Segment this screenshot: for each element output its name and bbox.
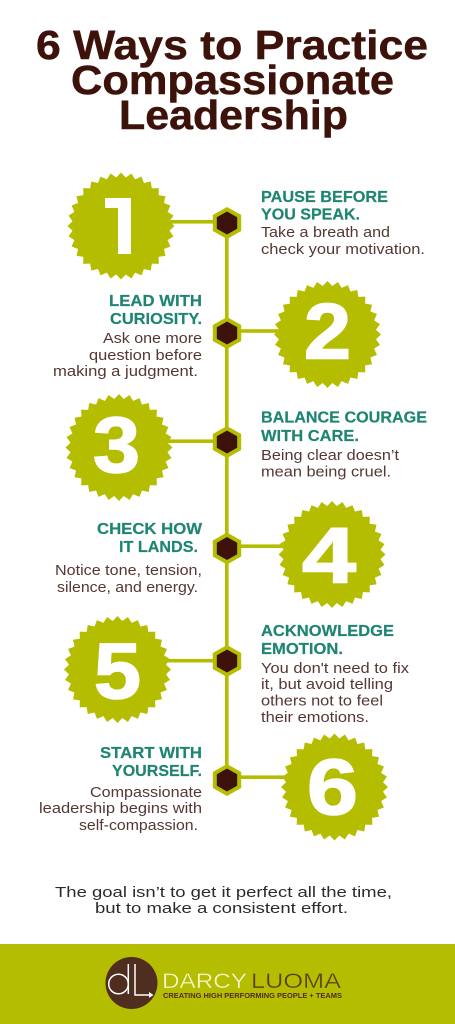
title: Leadership: [119, 92, 348, 138]
title: 6 Ways to Practice: [36, 22, 428, 68]
step 1 node: [213, 207, 241, 239]
step 4 text: silence, and energy.: [57, 580, 198, 596]
step 2 text: CURIOSITY.: [110, 311, 202, 328]
step 1 text: check your motivation.: [261, 242, 425, 258]
logo wordmark: DARCY: [162, 970, 247, 993]
step 2 text: question before: [89, 348, 202, 364]
step 2 badge: 2: [304, 286, 351, 376]
step 5 badge: 5: [94, 626, 141, 715]
step 6 badge: 6: [307, 742, 358, 831]
step 6 badge: [240, 734, 388, 840]
title: Compassionate: [71, 57, 394, 103]
closing statement: The goal isn’t to get it perfect all the time,: [55, 884, 392, 901]
step 3 badge: [66, 394, 215, 501]
closing statement: [55, 884, 392, 917]
step 6 text: leadership begins with: [39, 801, 202, 817]
step 6 text: YOURSELF.: [112, 763, 202, 780]
step 5 text: You don't need to fix: [261, 661, 410, 677]
step 1 text: PAUSE BEFORE: [261, 189, 388, 206]
footer band: [0, 944, 455, 1024]
step 1 badge: [68, 172, 215, 280]
step 4 badge: 4: [302, 510, 356, 600]
step 2 node: [213, 317, 241, 349]
logo wordmark: LUOMA: [251, 970, 341, 993]
step 4 text: Notice tone, tension,: [55, 563, 202, 579]
title: [36, 22, 428, 138]
step 4 text: [55, 521, 203, 596]
step 2 badge: [240, 281, 381, 388]
step 5 node: [213, 645, 241, 677]
step 5 text: EMOTION.: [261, 641, 343, 658]
step 1 text: [261, 189, 425, 258]
step 4 text: IT LANDS.: [119, 539, 198, 556]
step 4 node: [213, 532, 241, 564]
logo mark: [106, 957, 158, 1009]
step 3 node: [213, 426, 241, 458]
step 3 badge: 3: [93, 400, 140, 489]
step 2 text: making a judgment.: [53, 364, 198, 380]
step 6 text: [39, 745, 202, 834]
step 5 badge: [64, 616, 215, 723]
logo wordmark: CREATING HIGH PERFORMING PEOPLE + TEAMS: [163, 991, 342, 1000]
step 4 text: CHECK HOW: [97, 521, 203, 538]
step 5 text: it, but avoid telling: [261, 677, 393, 693]
step 2 text: [53, 293, 202, 380]
timeline spine: [225, 223, 229, 780]
step 3 text: mean being cruel.: [261, 464, 391, 480]
step 6 text: Compassionate: [90, 785, 202, 801]
step 1 text: Take a breath and: [261, 225, 390, 241]
step 6 node: [213, 764, 241, 796]
step 4 badge: [240, 501, 386, 608]
step 3 text: WITH CARE.: [261, 428, 359, 445]
step 5 text: their emotions.: [261, 710, 369, 726]
logo: [106, 957, 342, 1009]
step 3 text: BALANCE COURAGE: [261, 410, 427, 426]
step 5 text: ACKNOWLEDGE: [261, 623, 394, 640]
step 5 text: others not to feel: [261, 694, 383, 710]
step 2 text: LEAD WITH: [109, 293, 202, 310]
logo wordmark: [162, 970, 342, 1000]
step 1 text: YOU SPEAK.: [261, 206, 360, 224]
step 3 text: Being clear doesn’t: [261, 448, 399, 464]
step 5 text: [261, 623, 410, 726]
step 3 text: [261, 410, 427, 480]
step 1 badge: 1: [102, 182, 135, 271]
closing statement: but to make a consistent effort.: [95, 900, 348, 917]
step 6 text: self-compassion.: [79, 818, 198, 834]
step 6 text: START WITH: [100, 745, 202, 762]
step 2 text: Ask one more: [103, 331, 202, 347]
